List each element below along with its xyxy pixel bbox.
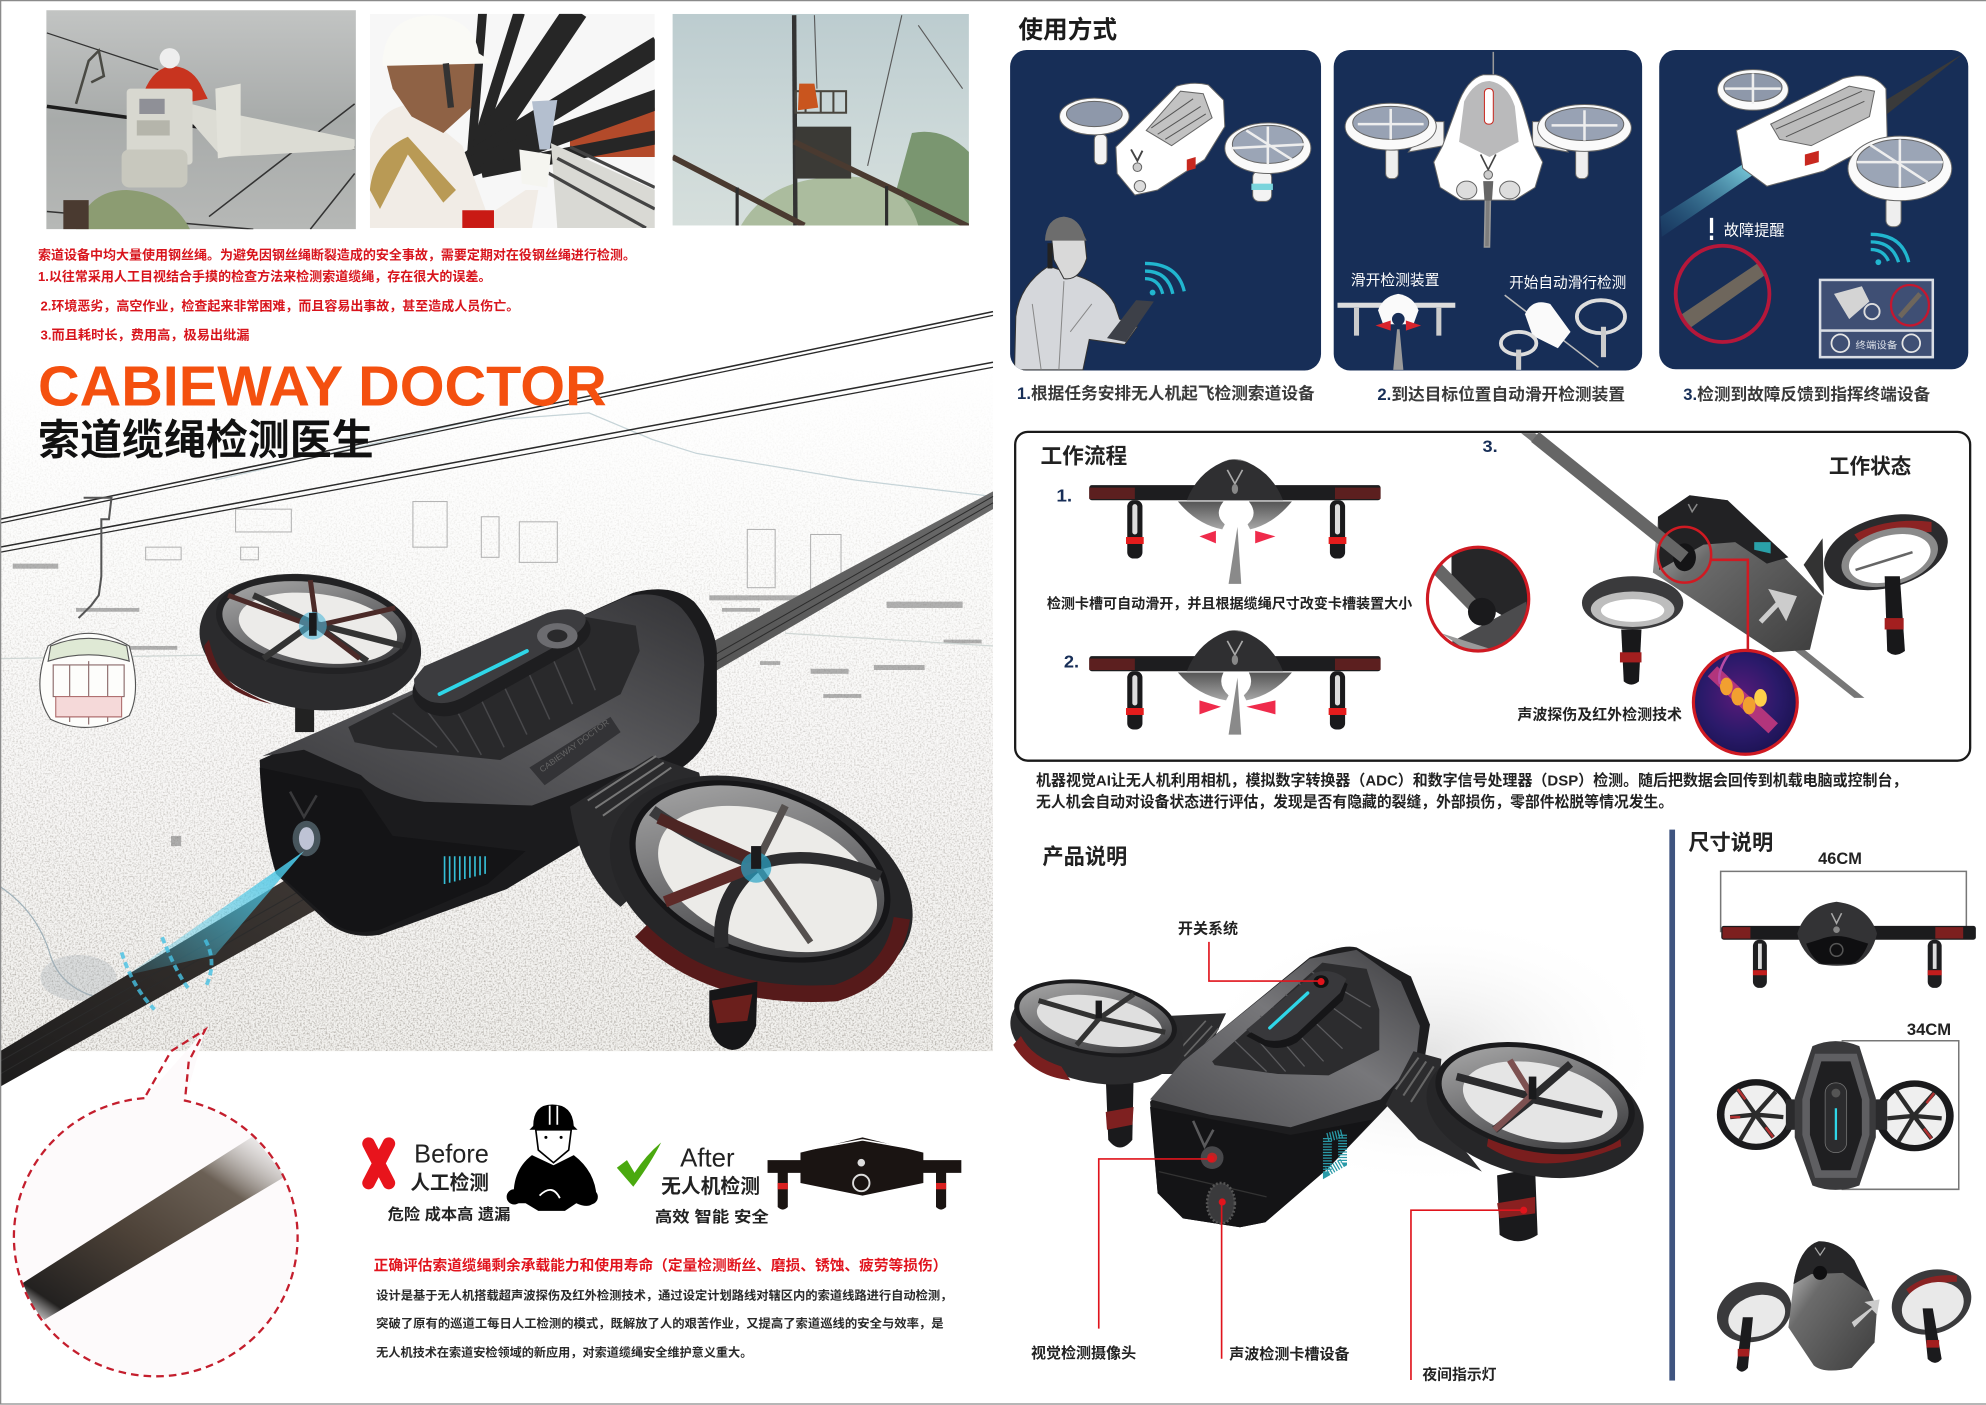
divider	[1669, 830, 1675, 1381]
intro text in red	[38, 248, 636, 342]
label: ultrasonic slot: 声波检测卡槽设备	[1229, 1345, 1350, 1363]
logo plate	[529, 717, 621, 785]
right rotor	[1386, 1025, 1656, 1241]
after: green check	[617, 1142, 661, 1187]
scan beam	[1660, 157, 1761, 237]
right ring	[1816, 502, 1956, 655]
panel: step 1	[1010, 50, 1321, 370]
top plate	[1150, 950, 1420, 1127]
right landing leg	[709, 982, 757, 1050]
icon: inspection worker	[507, 1104, 598, 1211]
dimension: 46cm label: 46CM	[1818, 850, 1862, 868]
caption: slot auto slides: 检测卡槽可自动滑开，并且根据缆绳尺寸改变卡槽装置大小	[1047, 596, 1412, 613]
dimension: length bracket	[1842, 1041, 1959, 1189]
dimension: 34cm label: 34CM	[1907, 1021, 1951, 1039]
main hero drone	[0, 491, 993, 1087]
underside drone working state	[1521, 433, 1956, 698]
callout marker and leader	[1658, 527, 1748, 650]
red headline: 正确评估索道缆绳剩余承载能力和使用寿命（定量检测断丝、磨损、锈蚀、疲劳等损伤）	[374, 1256, 947, 1274]
terminal device	[1819, 279, 1934, 358]
after text: 无人机检测	[661, 1175, 760, 1198]
label: slide open: 滑开检测装置	[1351, 272, 1439, 289]
underside small drone	[1709, 1241, 1980, 1372]
callout leaders	[1099, 942, 1527, 1380]
product drone	[1002, 947, 1656, 1241]
ribbed panel	[348, 614, 640, 760]
front camera light and scan beam	[122, 792, 320, 1009]
title: CABIEWAY DOCTOR	[38, 354, 607, 418]
intro text in red: 3.而且耗时长，费用高，极易出纰漏	[41, 327, 250, 342]
front view small drone	[1721, 902, 1976, 988]
front view drone: slot open	[1089, 459, 1381, 584]
rope in step 2	[1484, 52, 1493, 247]
subtitle: 索道缆绳检测医生	[38, 417, 374, 464]
mini drone: slider run	[1501, 295, 1625, 370]
top plate	[262, 594, 704, 806]
description text: 无人机技术在索道安检领域的新应用，对索道缆绳安全维护意义重大。	[376, 1345, 752, 1359]
photo: worker measuring steel cables	[370, 10, 659, 228]
description text: 突破了原有的巡道工每日人工检测的模式，既解放了人的艰苦作业，又提高了索道巡线的安全与效率，是	[376, 1316, 944, 1330]
machine vision description: 无人机会自动对设备状态进行评估，发现是否有隐藏的裂缝，外部损伤，零部件松脱等情况发生。	[1036, 793, 1673, 811]
intro text in red: 索道设备中均大量使用钢丝绳。为避免因钢丝绳断裂造成的安全事故，需要定期对在役钢丝绳进行检测。	[38, 248, 636, 263]
terminal device: 终端设备	[1856, 339, 1898, 351]
right rotor ring	[570, 736, 943, 1029]
pill	[1246, 971, 1348, 1048]
label: vision camera: 视觉检测摄像头	[1031, 1344, 1136, 1362]
left rotor ring	[191, 560, 430, 732]
heading: dimensions: 尺寸说明	[1688, 831, 1773, 855]
icon: wifi signal	[1871, 234, 1909, 265]
front dark face	[260, 768, 526, 932]
heading: usage: 使用方式	[1018, 15, 1117, 44]
photo: worker in bucket truck	[46, 10, 356, 229]
panel: step 3	[1659, 50, 1968, 369]
cyan vent	[445, 856, 485, 884]
thin cables	[0, 312, 993, 552]
label: start sliding: 开始自动滑行检测	[1509, 275, 1626, 292]
top view small drone	[1717, 1041, 1954, 1190]
description text	[376, 1288, 952, 1359]
detail circle: clamp	[1426, 546, 1533, 652]
label: night indicator: 夜间指示灯	[1422, 1365, 1497, 1383]
caption: ultrasonic and infrared: 声波探伤及红外检测技术	[1517, 705, 1682, 723]
rope in step 3	[1886, 54, 1962, 114]
step number 1: 1.	[1056, 486, 1072, 506]
machine vision description	[1036, 771, 1907, 811]
worker with tablet	[1015, 217, 1154, 370]
panel: step 2	[1334, 50, 1642, 370]
photo: cable car inspection cart	[673, 14, 969, 227]
before text: Before	[414, 1139, 489, 1169]
alert label: 故障提醒	[1724, 222, 1785, 240]
panel: hero background sketch	[0, 367, 993, 1051]
ribbed panel	[1212, 963, 1379, 1075]
heading: product description: 产品说明	[1042, 845, 1127, 869]
white drone step 3	[1717, 70, 1952, 227]
left leg	[1106, 1077, 1134, 1148]
intro text in red: 2.环境恶劣，高空作业，检查起来非常困难，而且容易出事故，甚至造成人员伤亡。	[41, 298, 519, 313]
body	[1653, 495, 1823, 652]
before text	[388, 1139, 510, 1224]
white drone step 1	[1059, 83, 1311, 201]
logo plate: CABIEWAY DOCTOR	[538, 718, 611, 774]
after text: 高效 智能 安全	[655, 1208, 769, 1226]
icon: drone silhouette	[768, 1137, 961, 1210]
rope	[1521, 433, 1864, 698]
dimension: width bracket	[1721, 871, 1966, 932]
step number 3: 3.	[1483, 438, 1498, 456]
after text	[655, 1143, 769, 1226]
white drone step 2	[1345, 75, 1631, 200]
top pill with cyan light	[413, 609, 591, 716]
heading: workflow: 工作流程	[1040, 445, 1127, 469]
label: power switch: 开关系统	[1178, 919, 1238, 937]
before: red cross	[369, 1144, 389, 1183]
after text: After	[680, 1143, 735, 1173]
step captions	[1017, 384, 1931, 404]
description text: 设计是基于无人机搭载超声波探伤及红外检测技术，通过设定计划路线对辖区内的索道线路进行自动检测，	[376, 1288, 952, 1302]
front face	[1150, 1107, 1373, 1227]
callout: magnified rope bubble	[13, 1030, 298, 1376]
panel: workflow	[1015, 432, 1970, 761]
soft shadow	[1191, 912, 1672, 1191]
drone body	[260, 589, 717, 936]
alert label	[1710, 218, 1785, 240]
magnifier: damaged rope	[1674, 246, 1771, 342]
before text: 人工检测	[410, 1171, 489, 1194]
icon: wifi signal	[1145, 263, 1184, 295]
step number 2: 2.	[1064, 651, 1079, 671]
illustration: cable car gondola	[40, 498, 136, 727]
steel rope	[0, 491, 993, 1087]
intro text in red: 1.以往常采用人工目视结合手摸的检查方法来检测索道缆绳，存在很大的误差。	[38, 269, 491, 284]
step captions: 1.根据任务安排无人机起飞检测索道设备	[1017, 384, 1315, 403]
heading: working state: 工作状态	[1829, 455, 1911, 479]
left rotor	[1002, 968, 1226, 1097]
before text: 危险 成本高 遗漏	[388, 1206, 510, 1224]
step captions: 2.到达目标位置自动滑开检测装置	[1377, 385, 1625, 404]
front view drone: slot closed	[1089, 630, 1381, 735]
thermal image circle	[1692, 648, 1799, 755]
machine vision description: 机器视觉AI让无人机利用相机，模拟数字转换器（ADC）和数字信号处理器（DSP）检测。随后把数据会回传到机载电脑或控制台，	[1036, 771, 1907, 789]
body	[1150, 947, 1430, 1227]
mini drone: slider open	[1338, 294, 1455, 370]
step captions: 3.检测到故障反馈到指挥终端设备	[1683, 385, 1931, 404]
left ring	[1582, 576, 1683, 685]
